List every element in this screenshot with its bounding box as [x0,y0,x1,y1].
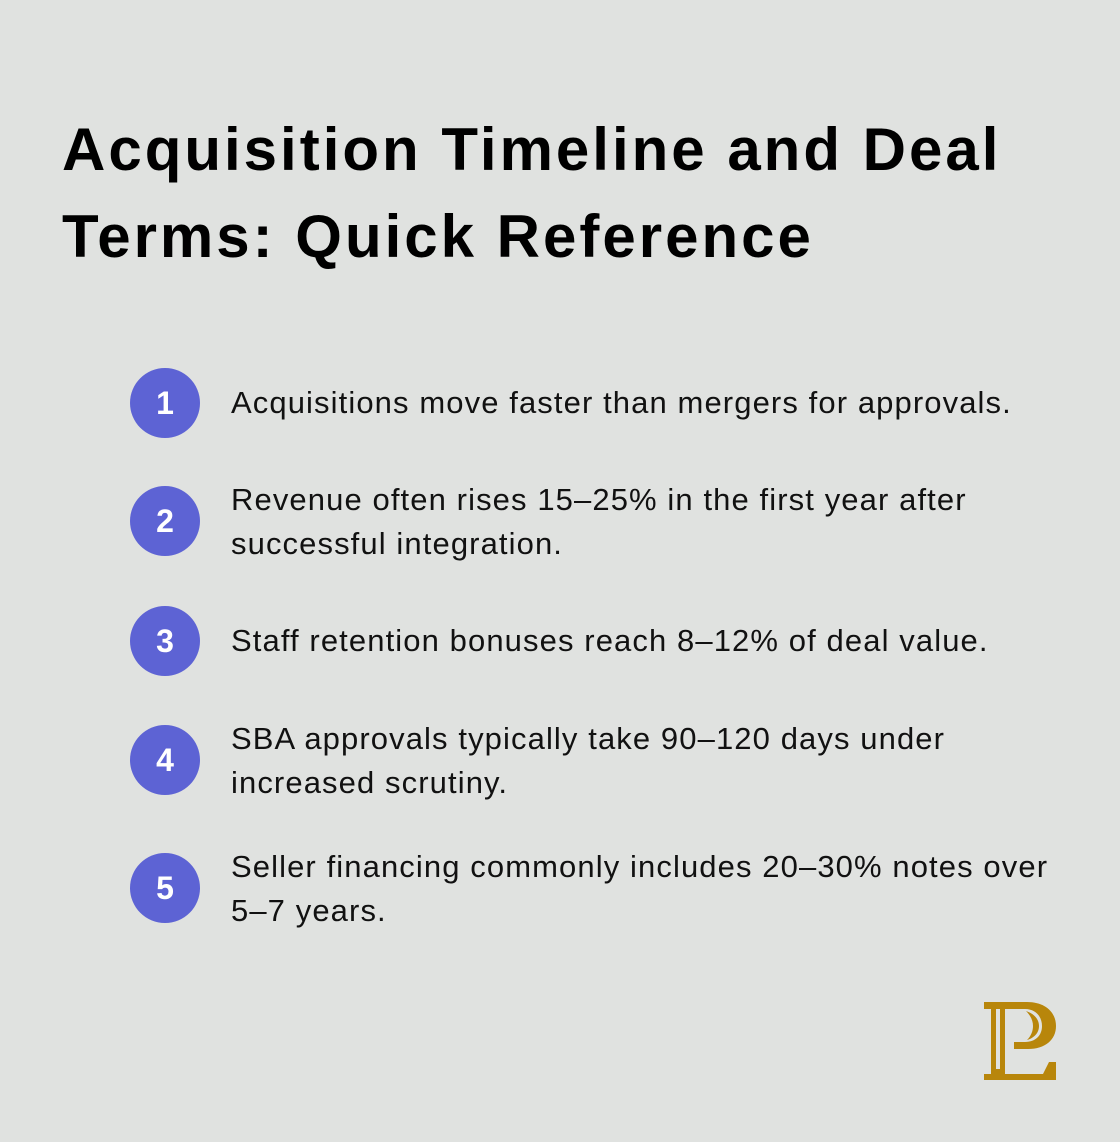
icon: number 5: 5 [156,870,174,906]
icon: number 5 [130,853,200,923]
icon: number 2 [130,486,200,556]
icon: number 3: 3 [156,623,174,659]
title [62,116,1001,270]
text 4: SBA approvals typically take 90–120 days under increased scrutiny. [231,721,945,800]
text 3: Staff retention bonuses reach 8–12% of deal value. [231,623,989,658]
icon: number 1 [130,368,200,438]
item 5 [130,849,1048,928]
item 4 [130,721,945,800]
text 1: Acquisitions move faster than mergers for approvals. [231,385,1012,420]
icon: number 3 [130,606,200,676]
title: Terms: Quick Reference [62,203,814,270]
icon: number 1: 1 [156,385,174,421]
icon: number 2: 2 [156,503,174,539]
logo [984,1002,1056,1080]
item 2 [130,482,967,561]
item 1 [130,368,1012,438]
icon: number 4: 4 [156,742,174,778]
item 3 [130,606,989,676]
title: Acquisition Timeline and Deal [62,116,1001,183]
text 2: Revenue often rises 15–25% in the first year after successful integration. [231,482,967,561]
text 5: Seller financing commonly includes 20–30% notes over 5–7 years. [231,849,1048,928]
icon: number 4 [130,725,200,795]
